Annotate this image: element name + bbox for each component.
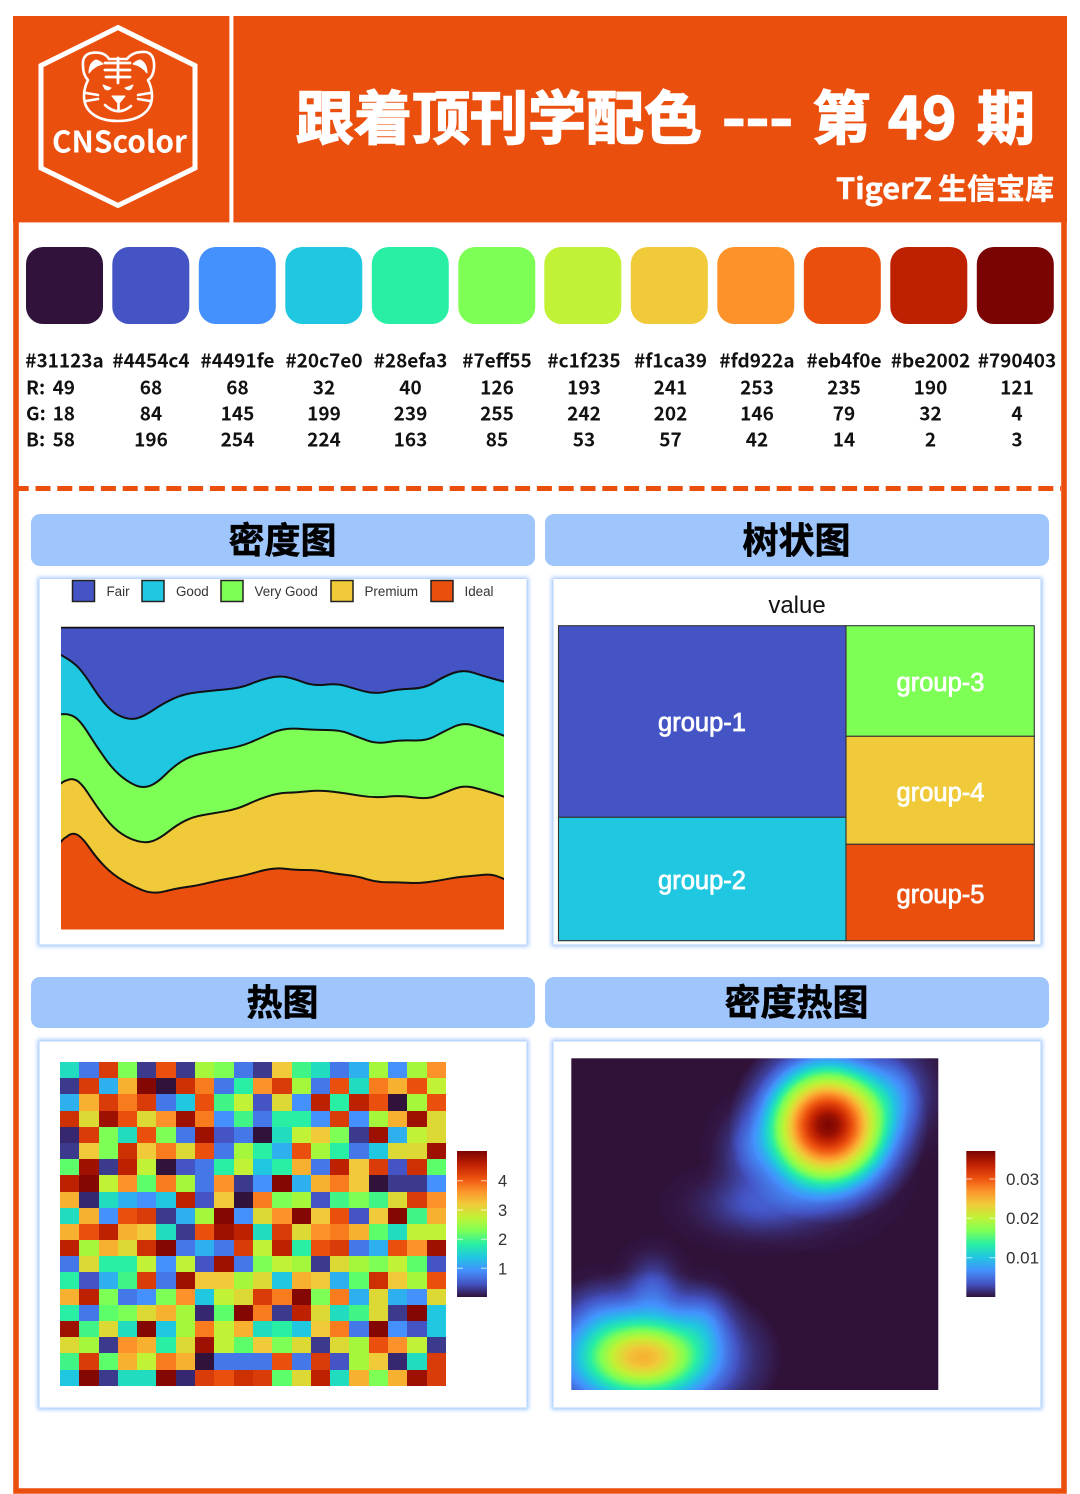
colour value table: 202	[654, 400, 687, 426]
heading: treemap: 树状图	[742, 512, 851, 564]
colour value table: 14	[833, 426, 855, 452]
heatmap colour bar: 1	[498, 1260, 507, 1278]
heatmap colour bar: 4	[498, 1172, 507, 1190]
colour value table: 32	[313, 374, 335, 400]
heading: density plot	[31, 512, 535, 566]
colour value table: 254	[221, 426, 254, 452]
colour value table: 68	[226, 374, 249, 400]
colour value table: 255	[480, 400, 514, 426]
colour value table: 32	[919, 400, 942, 426]
logo wordmark: CNScolor	[52, 118, 188, 162]
colour value table: R:	[26, 374, 45, 400]
legend: Ideal	[464, 584, 494, 599]
colour value table: 190	[914, 374, 947, 400]
colour value table: B:	[26, 426, 45, 452]
legend: Premium	[364, 584, 418, 599]
dashed divider	[14, 486, 1061, 491]
colour value table: #4491fe	[201, 346, 274, 374]
density colour bar	[966, 1151, 1039, 1297]
colour value table: #4454c4	[112, 346, 190, 374]
colour value table: 3	[1011, 426, 1023, 452]
colour value table: 85	[486, 426, 508, 452]
colour value table: 2	[925, 426, 936, 452]
colour value table: 146	[740, 400, 774, 426]
colour value table: #f1ca39	[634, 346, 707, 374]
subtitle: TigerZ	[836, 166, 932, 208]
colour value table: 121	[1000, 374, 1034, 400]
subtitle	[836, 166, 1054, 208]
heading: heatmap	[31, 974, 535, 1028]
heading: heatmap: 热图	[246, 974, 319, 1026]
colour value table: #fd922a	[719, 346, 795, 374]
colour value table: 18	[53, 400, 75, 426]
legend: Fair	[106, 584, 130, 599]
density raster	[503, 1015, 959, 1444]
colour value table: 235	[827, 374, 861, 400]
heading: density heatmap	[545, 974, 1049, 1028]
treemap title: value	[768, 592, 826, 619]
heatmap colour bar: 2	[498, 1231, 507, 1249]
treemap tiles	[558, 626, 1034, 941]
colour value table: #eb4f0e	[806, 346, 882, 374]
heatmap grid	[60, 1062, 446, 1386]
colour value table: 163	[394, 426, 427, 452]
colour value table: #c1f235	[547, 346, 621, 374]
title: 49	[888, 72, 956, 156]
heatmap colour bar: 3	[498, 1202, 507, 1220]
colour value table: 53	[573, 426, 595, 452]
density colour bar: 0.02	[1006, 1209, 1039, 1228]
panel: stacked density plot	[38, 578, 528, 950]
title: ---	[722, 72, 793, 156]
panel: heatmap card	[38, 1040, 528, 1410]
heading: treemap	[545, 512, 1049, 566]
panel: treemap	[552, 578, 1042, 946]
colour value table: 196	[134, 426, 168, 452]
colour value table: 58	[53, 426, 75, 452]
colour value table: 241	[654, 374, 687, 400]
colour value table: 68	[140, 374, 162, 400]
colour value table: 242	[567, 400, 601, 426]
legend: Good	[176, 584, 209, 599]
treemap labels: group-1	[658, 709, 746, 737]
header band: title panel	[233, 16, 1067, 222]
colour value table: 145	[221, 400, 254, 426]
heading: density plot: 密度图	[228, 512, 337, 564]
colour value table: #28efa3	[374, 346, 447, 374]
colour value table: 57	[659, 426, 682, 452]
colour value table: 42	[746, 426, 768, 452]
colour swatches	[26, 247, 1054, 324]
colour value table: 40	[399, 374, 422, 400]
colour value table: 199	[307, 400, 341, 426]
treemap labels	[658, 669, 984, 909]
title: 跟着顶刊学配色	[296, 72, 702, 156]
colour value table: G:	[26, 400, 46, 426]
colour value table: 239	[394, 400, 427, 426]
legend	[72, 580, 494, 602]
title: 期	[977, 72, 1035, 156]
colour value table: 84	[140, 400, 162, 426]
colour value table: 4	[1011, 400, 1023, 426]
stacked area chart	[61, 626, 504, 930]
title	[296, 72, 1035, 156]
colour value table: #be2002	[891, 346, 970, 374]
density colour bar: 0.01	[1006, 1248, 1039, 1268]
colour value table: #31123a	[25, 346, 104, 374]
treemap labels: group-4	[897, 779, 984, 807]
colour value table: 193	[567, 374, 601, 400]
icon: hexagon badge	[41, 28, 195, 206]
heatmap colour bar	[457, 1151, 507, 1297]
colour value table: 253	[740, 374, 774, 400]
treemap labels: group-3	[897, 669, 984, 697]
title: 第	[812, 72, 871, 156]
colour value table: #790403	[978, 346, 1056, 374]
legend: Very Good	[254, 584, 318, 599]
colour value table: #20c7e0	[285, 346, 363, 374]
colour value table: 49	[53, 374, 75, 400]
icon: tiger head	[83, 52, 154, 121]
panel: density heatmap card	[503, 1015, 1042, 1444]
treemap labels: group-2	[658, 867, 746, 895]
density colour bar: 0.03	[1006, 1170, 1039, 1189]
colour value table: 126	[480, 374, 514, 400]
treemap labels: group-5	[897, 881, 984, 909]
colour value table: 79	[833, 400, 855, 426]
subtitle: 生信宝库	[938, 166, 1054, 208]
colour value table: 224	[307, 426, 341, 452]
header band: logo panel	[13, 16, 229, 222]
colour value table	[25, 346, 1056, 452]
heading: density heatmap: 密度热图	[724, 974, 869, 1026]
colour value table: #7eff55	[462, 346, 532, 374]
